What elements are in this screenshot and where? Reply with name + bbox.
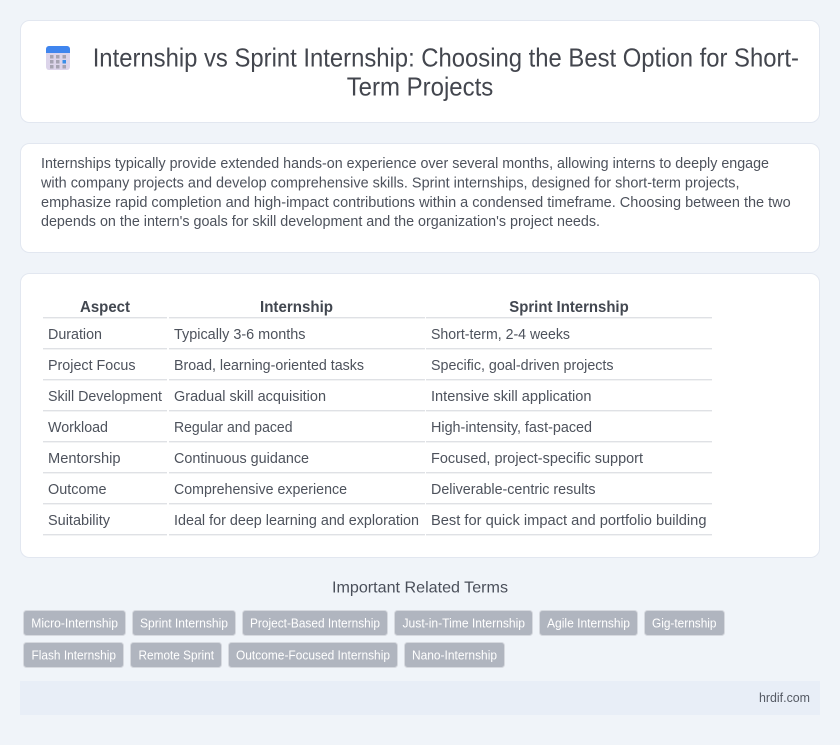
row: skill development: Gradual skill acquisition xyxy=(174,389,326,405)
table header: Internship xyxy=(260,299,333,316)
panel: intro paragraph xyxy=(20,144,820,252)
row: duration xyxy=(48,327,570,343)
row: workload: Regular and paced xyxy=(174,420,292,436)
row: mentorship xyxy=(48,451,643,467)
row: project focus: Specific, goal-driven projects xyxy=(431,358,614,374)
text block: intro: Internships typically provide extended hands-on experience over several months, allowing interns to deeply engage xyxy=(41,156,769,172)
text block: intro: with company projects and develop comprehensive skills. Sprint internships, designed for short-term projects, xyxy=(40,176,740,192)
row: outcome: Deliverable-centric results xyxy=(431,482,596,498)
text block: intro: emphasize rapid completion and high-impact contributions within a condensed timeframe. Choosing between the two xyxy=(41,195,791,211)
text block: intro xyxy=(40,156,791,230)
tags: related terms: Micro-Internship xyxy=(31,615,118,630)
row: duration: Duration xyxy=(48,327,102,343)
table header: Sprint Internship xyxy=(509,299,629,316)
row: workload xyxy=(48,420,592,436)
row: skill development: Intensive skill application xyxy=(431,389,592,405)
row: workload: High-intensity, fast-paced xyxy=(431,420,592,436)
panel: title card xyxy=(20,20,820,122)
footer xyxy=(20,681,820,715)
tags: related terms: Project-Based Internship xyxy=(250,615,380,630)
row: mentorship: Continuous guidance xyxy=(174,451,309,467)
row: suitability: Suitability xyxy=(48,513,111,529)
row: outcome: Outcome xyxy=(48,482,106,498)
tags: related terms: Just-in-Time Internship xyxy=(402,615,525,630)
row: skill development: Skill Development xyxy=(48,389,162,405)
row: suitability xyxy=(48,513,706,529)
row: outcome: Comprehensive experience xyxy=(174,482,347,498)
row: suitability: Ideal for deep learning and exploration xyxy=(174,513,419,529)
tags: related terms: Sprint Internship xyxy=(140,615,228,630)
row: outcome xyxy=(48,482,596,498)
footer: hrdif.com xyxy=(759,690,810,705)
row: skill development xyxy=(48,389,592,405)
tags: related terms: Flash Internship xyxy=(32,647,116,662)
row: project focus xyxy=(48,358,614,374)
tags: related terms: Remote Sprint xyxy=(138,647,214,662)
title xyxy=(93,45,799,102)
row: project focus: Project Focus xyxy=(48,358,136,374)
title: Term Projects xyxy=(347,74,493,102)
row: workload: Workload xyxy=(48,420,108,436)
heading: related terms: Important Related Terms xyxy=(332,580,508,597)
row: suitability: Best for quick impact and portfolio building xyxy=(431,513,706,529)
tags: related terms: Nano-Internship xyxy=(412,647,497,662)
row: mentorship: Focused, project-specific support xyxy=(431,451,643,467)
panel: comparison table xyxy=(20,274,820,558)
text block: intro: depends on the intern's goals for skill development and the organization's project needs. xyxy=(41,214,600,230)
row: duration: Typically 3-6 months xyxy=(174,327,306,343)
row: project focus: Broad, learning-oriented tasks xyxy=(174,358,364,374)
row: mentorship: Mentorship xyxy=(48,451,120,467)
table header xyxy=(80,299,629,316)
icon: calendar xyxy=(46,46,70,70)
title: Internship vs Sprint Internship: Choosing the Best Option for Short- xyxy=(93,45,799,73)
row: duration: Short-term, 2-4 weeks xyxy=(431,327,570,343)
table header: Aspect xyxy=(80,299,131,316)
tags: related terms: Outcome-Focused Internship xyxy=(236,647,390,662)
tags: related terms: Agile Internship xyxy=(547,615,630,630)
tags: related terms: Gig-ternship xyxy=(652,615,716,630)
tags: related terms xyxy=(24,610,724,668)
